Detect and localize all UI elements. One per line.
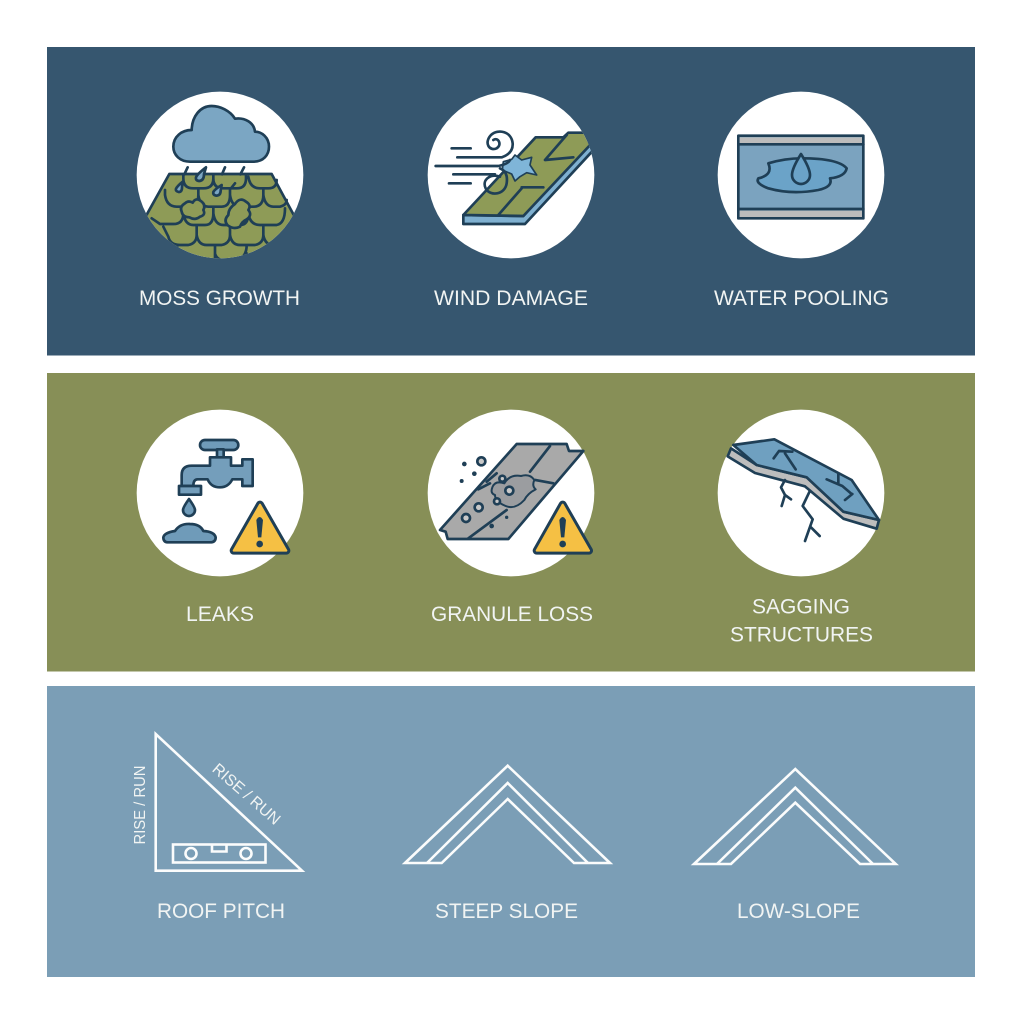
label: steep slope: STEEP SLOPE <box>435 900 578 923</box>
label: moss growth: MOSS GROWTH <box>139 287 300 310</box>
panel: roof problems (navy) <box>47 47 975 356</box>
icon: steep slope <box>405 766 610 863</box>
label: leaks: LEAKS <box>186 603 254 626</box>
label: wind damage: WIND DAMAGE <box>434 287 588 310</box>
label: sagging structures: SAGGING <box>752 596 850 618</box>
rise / run vertical label: RISE / RUN <box>132 766 149 844</box>
icon: granule loss <box>428 410 594 576</box>
icon: sagging structures <box>718 410 884 576</box>
label: water pooling: WATER POOLING <box>714 287 889 310</box>
icon: leaks <box>137 410 303 576</box>
panel: roof slopes (light blue) <box>47 686 975 977</box>
label: granule loss: GRANULE LOSS <box>431 603 593 626</box>
label: sagging structures: STRUCTURES <box>730 624 873 646</box>
rise / run diagonal label: RISE / RUN <box>209 761 283 829</box>
icon: moss growth <box>137 92 303 267</box>
label: roof pitch: ROOF PITCH <box>157 900 285 923</box>
icon: roof pitch triangle with level <box>132 734 302 871</box>
panel: surface failures (olive) <box>47 373 975 672</box>
label: sagging structures <box>730 596 873 646</box>
icon: low slope <box>694 769 896 864</box>
icon: water pooling <box>718 92 884 258</box>
label: low-slope: LOW-SLOPE <box>737 900 860 923</box>
icon: wind damage <box>428 92 602 258</box>
